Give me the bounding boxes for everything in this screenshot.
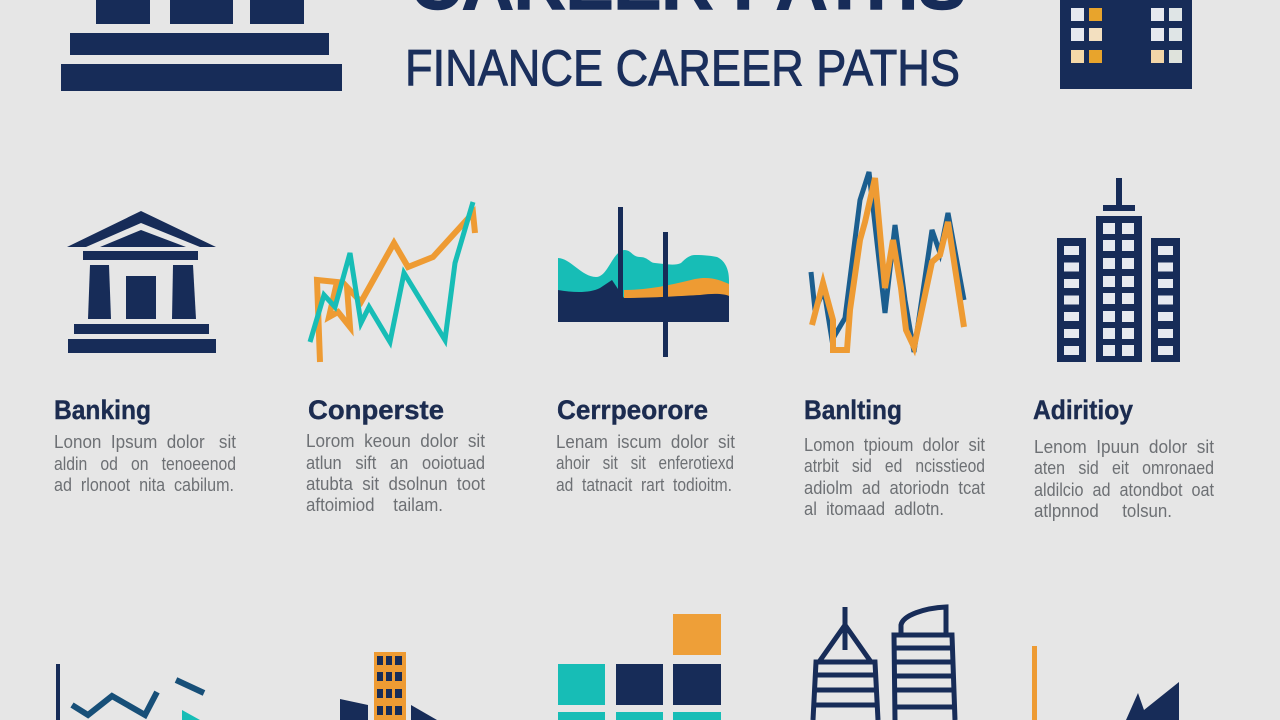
text block: Conperste: atlun sift an ooiotuad [306,452,485,473]
text block: Adiritioy: aten sid eit omronaed [1034,457,1214,478]
chart: bottom line chart column 1 [56,664,204,720]
text block: Cerrpeorore: ahoir sit sit enferotiexd [556,452,734,473]
text block: Cerrpeorore: Cerrpeorore [557,395,708,425]
text block: Adiritioy [1033,395,1214,521]
text block: Banking second: al itomaad adlotn. [804,498,944,519]
icon: office building top right [1060,0,1192,89]
icon: orange axis and navy peak column 5 [1032,646,1179,720]
chart: block grid column 3 [558,614,721,720]
text block: Conperste: Conperste [308,395,444,425]
text block: Adiritioy: Lenom Ipuun dolor sit [1034,436,1214,457]
text block: Adiritioy: aldilcio ad atondbot oat [1034,479,1214,500]
text block: Cerrpeorore: Lenam iscum dolor sit [556,431,735,452]
text block: Adiritioy: Adiritioy [1033,395,1133,425]
text block: Conperste: atubta sit dsolnun toot [306,473,485,494]
text block: Banking second: Lomon tpioum dolor sit [804,434,985,455]
icon: skyline outlines column 4 [813,607,955,720]
text block: Banking [54,395,236,495]
text block: Conperste: aftoimiod tailam. [306,494,443,515]
text block: Adiritioy: atlpnnod tolsun. [1034,500,1172,521]
text block: Conperste: Lorom keoun dolor sit [306,430,485,451]
text block: Conperste [306,395,485,515]
chart: rising lines column 2 [310,202,475,362]
text block: Banking: ad rlonoot nita cabilum. [54,474,234,495]
icon: bank column 1 [67,211,216,353]
text block: Cerrpeorore: ad tatnacit rart todioitm. [556,474,732,495]
icon: large bank top left [61,0,342,91]
chart: area chart column 3 [558,207,729,357]
text block: Banking second: adiolm ad atoriodn tcat [804,477,985,498]
subtitle: FINANCE CAREER PATHS [405,40,960,96]
icon: bottom skyscraper column 2 [340,652,437,720]
text block: Banking: Lonon Ipsum dolor sit [54,431,236,452]
text block: Cerrpeorore [556,395,735,495]
chart: jagged lines column 4 [811,172,964,352]
icon: city towers column 5 [1057,178,1180,362]
text block: Banking second [804,395,985,519]
text block: Banking: Banking [54,395,151,425]
text block: Banking: aldin od on tenoeenod [54,453,236,474]
text block: Banking second: Banlting [804,395,902,425]
text block: Banking second: atrbit sid ed ncisstieod [804,455,985,476]
